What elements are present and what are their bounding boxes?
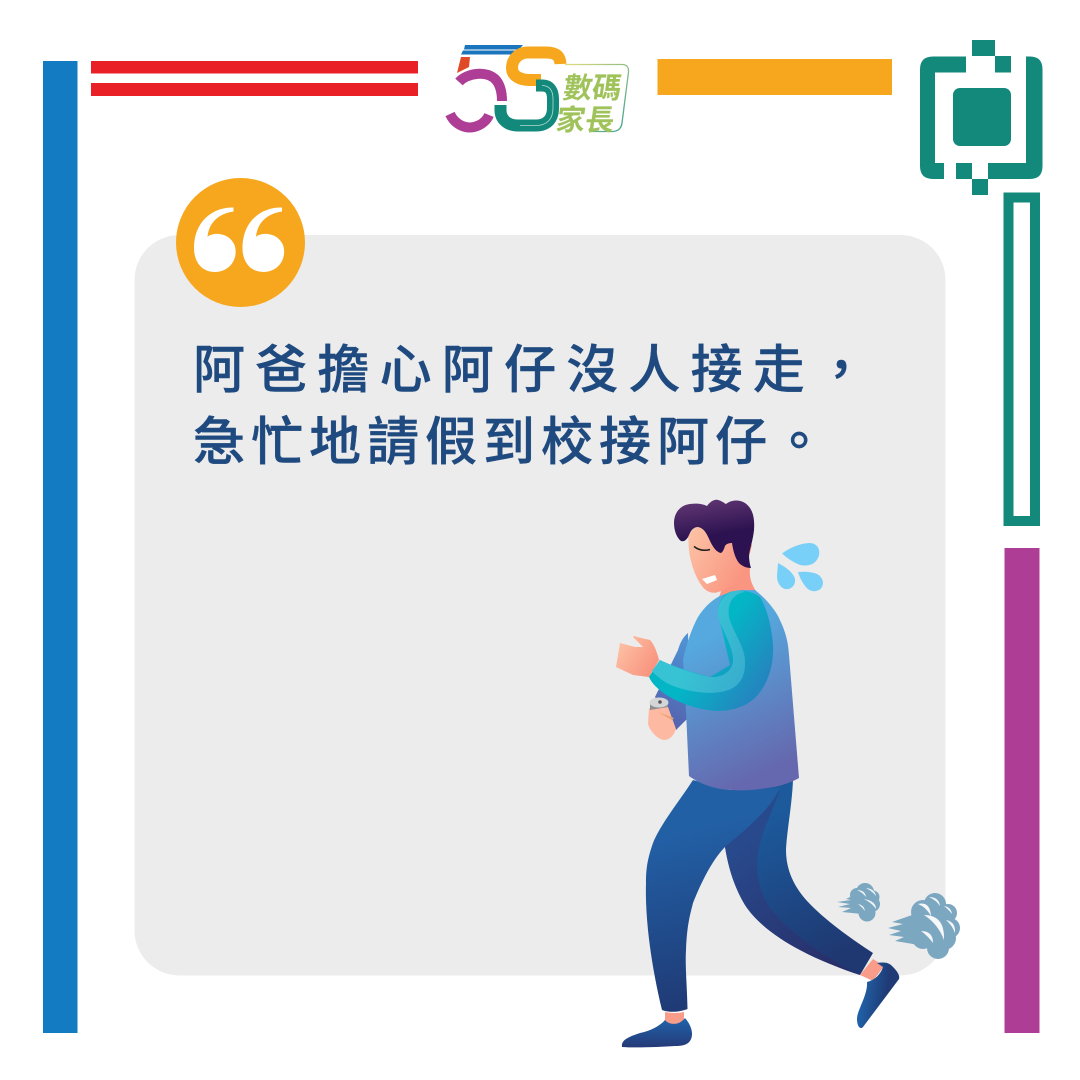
logo text: 數碼 — [561, 72, 624, 105]
lower hand with watch — [648, 698, 676, 740]
teeth — [702, 575, 717, 584]
neck — [719, 565, 756, 597]
green hollow bar — [1008, 198, 1035, 521]
closed eye — [694, 546, 710, 550]
front leg — [646, 780, 780, 1012]
logo text — [554, 72, 624, 137]
top right green pixel icon — [920, 40, 1042, 195]
back sock — [860, 959, 884, 981]
quote text: 急忙地請假到校接阿仔。 — [193, 414, 831, 472]
front sock — [665, 1012, 684, 1028]
left blue bar — [43, 61, 78, 1033]
quote badge — [176, 178, 305, 307]
running man — [616, 500, 899, 1047]
small cloud — [837, 883, 880, 922]
purple bar — [1004, 548, 1040, 1033]
front shoe — [622, 1018, 692, 1047]
quote text: 阿爸擔心阿仔沒人接走， — [193, 342, 877, 400]
dust clouds — [837, 883, 960, 959]
grey quote panel — [134, 235, 946, 976]
hair — [674, 500, 754, 568]
face — [688, 520, 752, 593]
logo text: 家長 — [554, 104, 617, 137]
sweater — [683, 590, 799, 790]
front arm — [649, 590, 773, 711]
back shoe — [857, 962, 899, 1028]
quote text — [193, 342, 877, 472]
logo: 55 數碼家長 — [450, 45, 629, 137]
raised hand — [616, 636, 659, 677]
orange bar — [658, 59, 892, 95]
sweat drops — [777, 543, 823, 591]
back arm — [655, 633, 690, 730]
large cloud — [888, 893, 960, 959]
back leg — [725, 780, 873, 975]
red double bars — [91, 61, 418, 96]
